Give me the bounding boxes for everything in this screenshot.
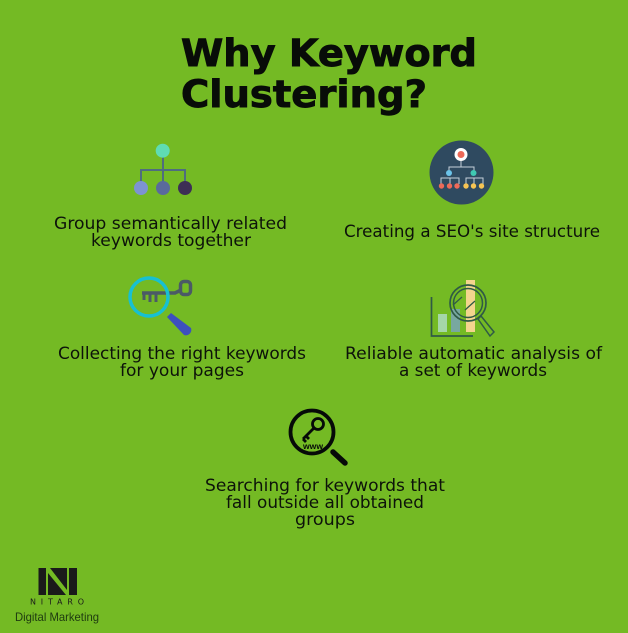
title (181, 32, 477, 116)
icon: www key magnifier (290, 410, 345, 463)
title: Clustering? (181, 73, 427, 116)
text: reliable automatic analysis: Reliable automatic analysis of (345, 344, 603, 363)
text: searching for keywords: fall outside all obtained (226, 493, 424, 512)
icon: chart with magnifier (432, 280, 494, 336)
text: searching for keywords: Searching for keywords that (205, 476, 446, 495)
icon: www key magnifier: www (302, 442, 324, 451)
logo: Nitaro Digital Marketing (15, 568, 99, 624)
title: Why Keyword (181, 32, 477, 75)
icon: site structure badge (430, 140, 494, 204)
icon: key under magnifier (130, 278, 191, 335)
text: searching for keywords (205, 476, 446, 529)
logo: Nitaro Digital Marketing: NITARO (30, 598, 84, 606)
text: collecting the right keywords: for your pages (120, 361, 244, 380)
text: collecting the right keywords: Collecting the right keywords (58, 344, 306, 363)
text: reliable automatic analysis (345, 344, 603, 380)
icon: hierarchy of circles (134, 144, 192, 195)
text: creating site structure: Creating a SEO's site structure (344, 222, 600, 241)
text: group semantically related keywords: Group semantically related (54, 214, 287, 233)
text: searching for keywords: groups (295, 510, 355, 529)
text: collecting the right keywords (58, 344, 306, 380)
text: group semantically related keywords (54, 214, 287, 250)
logo: Nitaro Digital Marketing: Digital Marketing (15, 610, 99, 624)
text: group semantically related keywords: keywords together (91, 231, 251, 250)
text: reliable automatic analysis: a set of keywords (399, 361, 547, 380)
